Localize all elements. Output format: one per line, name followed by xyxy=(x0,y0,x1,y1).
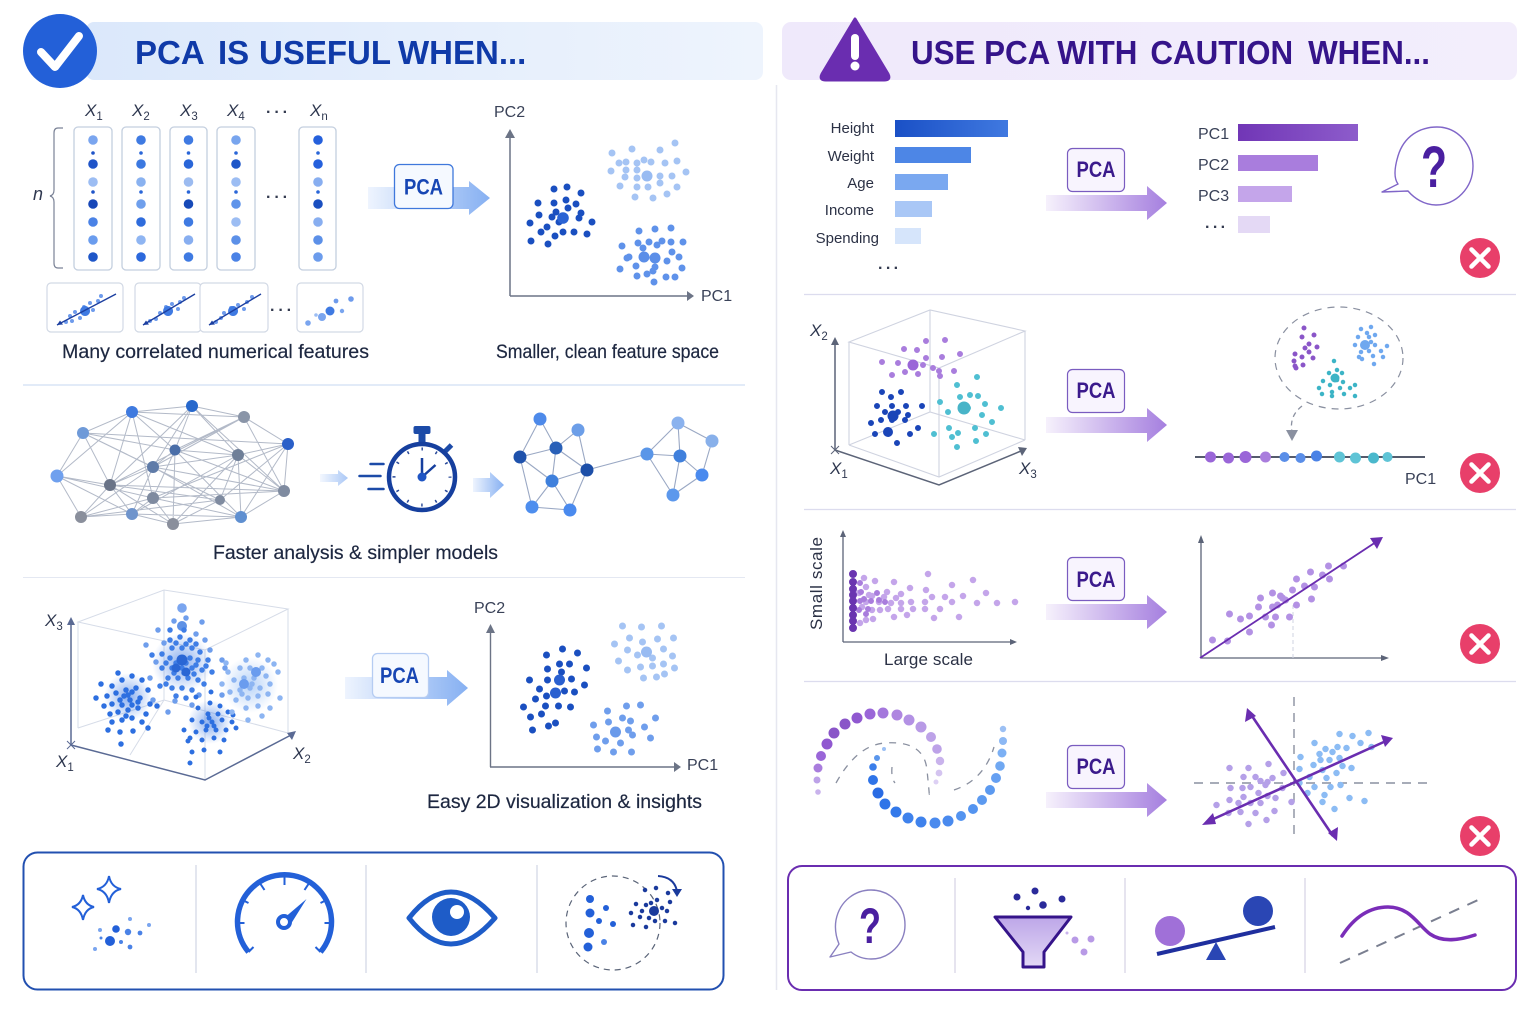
caption: faster analysis: Faster analysis & simpler models xyxy=(213,542,498,564)
panel: easy 2D visualization xyxy=(44,590,718,813)
panel: caution summary icons xyxy=(788,866,1516,990)
feature matrix xyxy=(33,101,336,270)
principal component bars: PC1 xyxy=(1198,126,1229,143)
icon: question bubble xyxy=(1382,127,1473,205)
correlation mini scatter plots: ··· xyxy=(270,302,292,319)
icon: question bubble: ? xyxy=(1421,135,1447,200)
3D scatter cube: 1 xyxy=(67,762,74,774)
PC scatter plot three xyxy=(474,600,718,774)
3D cube with three clusters: 2 xyxy=(821,331,828,343)
feature matrix: X xyxy=(85,101,96,120)
3D scatter cube: X xyxy=(56,752,67,771)
feature matrix: X xyxy=(132,101,143,120)
PCA arrow row four xyxy=(1046,746,1167,817)
heading: caution: WITH xyxy=(1057,34,1137,71)
true clusters in dashed bubble xyxy=(1275,307,1403,441)
principal component bars xyxy=(1198,124,1358,236)
principal component bars: ··· xyxy=(1205,219,1226,236)
panel: useful summary icons xyxy=(24,852,724,990)
feature matrix: ··· xyxy=(266,189,288,206)
header: PCA is useful when xyxy=(23,14,763,88)
panel: different scales bars xyxy=(816,120,1500,278)
icon: dashed cluster with rotation arrow xyxy=(566,876,682,970)
heading: caution: CAUTION xyxy=(1150,34,1293,71)
PC scatter plot one: PC2 xyxy=(494,104,525,121)
linear PCA axes on curved data xyxy=(1194,697,1434,841)
arrow: to simple network xyxy=(473,472,504,498)
3D scatter cube xyxy=(44,590,311,781)
feature matrix: ··· xyxy=(266,104,288,121)
3D cube with three clusters xyxy=(809,310,1037,485)
caption: easy 2D visualization: Easy 2D visualization & insights xyxy=(427,791,702,813)
PCA arrow row two xyxy=(1046,370,1167,442)
icon: eye xyxy=(409,892,495,944)
heading: useful: WHEN... xyxy=(398,34,526,71)
principal component bars: PC2 xyxy=(1198,157,1229,174)
panel: faster analysis xyxy=(50,400,718,564)
3D cube with three clusters: X xyxy=(1019,459,1030,478)
feature matrix: X xyxy=(310,101,321,120)
PC1 number line projection xyxy=(1195,450,1436,488)
original feature bars: Age xyxy=(847,175,874,192)
PC1 number line projection: PC1 xyxy=(1405,471,1436,488)
PCA arrow row two: PCA xyxy=(1076,378,1116,403)
heading: caution: WHEN... xyxy=(1308,34,1430,71)
skewed scatter plot xyxy=(807,530,1017,669)
caption: many correlated features: Many correlated numerical features xyxy=(62,341,369,363)
PCA arrow one: PCA xyxy=(404,174,443,200)
icon: warning triangle xyxy=(821,19,889,80)
correlation mini scatter plots xyxy=(47,283,363,332)
3D cube with three clusters: 3 xyxy=(1030,469,1037,481)
heading: useful: USEFUL xyxy=(259,34,391,71)
heading: caution: PCA xyxy=(984,34,1050,71)
feature matrix: 4 xyxy=(238,111,245,123)
3D scatter cube: X xyxy=(293,744,304,763)
feature matrix: n xyxy=(33,184,43,204)
PCA arrow row four: PCA xyxy=(1076,754,1116,779)
PC scatter plot one: PC1 xyxy=(701,288,732,305)
icon: red cross badge xyxy=(1460,453,1500,493)
panel: nonlinear structure xyxy=(814,697,1500,856)
feature matrix: n xyxy=(321,111,328,123)
panel: many correlated features to smaller space xyxy=(33,101,732,363)
spiral dots xyxy=(814,708,1007,828)
PC scatter plot one xyxy=(494,104,732,305)
icon: blue check circle xyxy=(23,14,97,88)
skewed scatter plot: Large scale xyxy=(884,650,973,669)
feature matrix: 1 xyxy=(96,111,103,123)
icon: question bubble: ? xyxy=(859,898,881,954)
icon: red cross badge xyxy=(1460,238,1500,278)
panel: unequal feature scales xyxy=(807,530,1500,669)
3D scatter cube: 2 xyxy=(304,754,311,766)
3D cube with three clusters: X xyxy=(810,321,821,340)
PCA arrow three xyxy=(345,654,468,706)
icon: funnel with dots xyxy=(995,888,1094,967)
icon: stopwatch xyxy=(360,426,455,510)
feature matrix: 2 xyxy=(143,111,150,123)
caption: smaller feature space: Smaller, clean feature space xyxy=(496,341,719,363)
original feature bars: Height xyxy=(831,120,875,137)
dense network xyxy=(50,400,294,530)
icon: question bubble xyxy=(830,890,905,959)
original feature bars: ··· xyxy=(878,260,899,277)
icon: unbalanced seesaw xyxy=(1155,896,1275,960)
PCA arrow one xyxy=(368,164,490,215)
PCA arrow row one xyxy=(1046,148,1167,220)
PC scatter plot three: PC1 xyxy=(687,757,718,774)
3D cube with three clusters: X xyxy=(830,459,841,478)
PC1 dominated scatter xyxy=(1198,535,1389,661)
original feature bars: Income xyxy=(825,202,874,219)
PCA arrow three: PCA xyxy=(380,663,419,688)
heading: useful: PCA xyxy=(135,34,204,71)
arrow: to stopwatch xyxy=(320,470,348,486)
PCA arrow row three xyxy=(1046,558,1167,629)
simple network xyxy=(514,412,718,516)
header: use PCA with caution when xyxy=(782,19,1517,80)
feature matrix: 3 xyxy=(191,111,198,123)
3D cube with three clusters: 1 xyxy=(841,469,848,481)
PCA arrow row one: PCA xyxy=(1076,157,1116,182)
3D scatter cube: 3 xyxy=(56,621,63,633)
original feature bars xyxy=(816,120,1008,277)
icon: red cross badge xyxy=(1460,816,1500,856)
panel: clusters collapse in projection xyxy=(809,307,1500,493)
PCA arrow row three: PCA xyxy=(1076,567,1116,592)
skewed scatter plot: Small scale xyxy=(807,537,826,630)
3D scatter cube: X xyxy=(45,611,56,630)
heading: useful: IS xyxy=(218,34,249,71)
icon: curve versus straight line xyxy=(1340,900,1478,963)
feature matrix: X xyxy=(180,101,191,120)
original feature bars: Spending xyxy=(816,230,879,247)
feature matrix: X xyxy=(227,101,238,120)
heading: caution: USE xyxy=(911,34,975,71)
icon: sparkles and dots xyxy=(72,876,151,951)
icon: speedometer xyxy=(236,875,332,952)
principal component bars: PC3 xyxy=(1198,188,1229,205)
PC scatter plot three: PC2 xyxy=(474,600,505,617)
original feature bars: Weight xyxy=(828,148,875,165)
icon: red cross badge xyxy=(1460,624,1500,664)
